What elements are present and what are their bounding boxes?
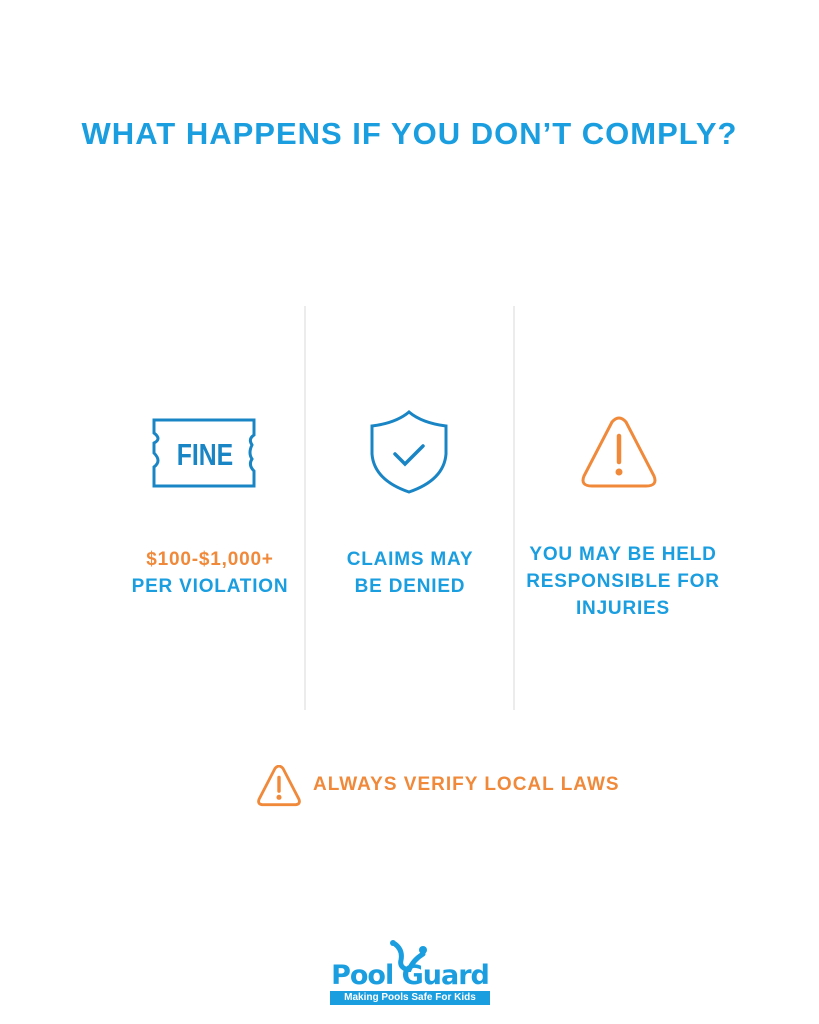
text: responsible: YOU MAY BE HELD	[529, 544, 717, 565]
title: WHAT HAPPENS IF YOU DON’T COMPLY?	[82, 116, 737, 151]
text: claims: BE DENIED	[355, 576, 465, 597]
icon: small warning	[257, 765, 301, 806]
divider 2	[513, 306, 515, 710]
icon: fine ticket	[152, 418, 256, 488]
text: fine: PER VIOLATION	[132, 576, 288, 597]
text: fine	[132, 549, 288, 597]
text: responsible: RESPONSIBLE FOR	[526, 571, 720, 592]
icon: shield	[370, 410, 448, 494]
logo tagline	[330, 991, 490, 1005]
callout text: ALWAYS VERIFY LOCAL LAWS	[313, 774, 620, 795]
logo text: Pool Guard	[331, 960, 489, 991]
text: responsible: INJURIES	[576, 598, 670, 619]
logo	[330, 940, 490, 1005]
callout: verify laws	[257, 765, 620, 806]
text: responsible	[526, 544, 720, 619]
text: fine: $100-$1,000+	[146, 549, 274, 570]
logo tagline: Making Pools Safe For Kids	[344, 992, 476, 1003]
logo splash	[390, 940, 427, 972]
text: claims: CLAIMS MAY	[347, 549, 473, 570]
text: claims	[347, 549, 473, 597]
divider 1	[304, 306, 306, 710]
icon: warning	[582, 416, 656, 488]
icon: fine ticket: FINE	[177, 437, 233, 472]
